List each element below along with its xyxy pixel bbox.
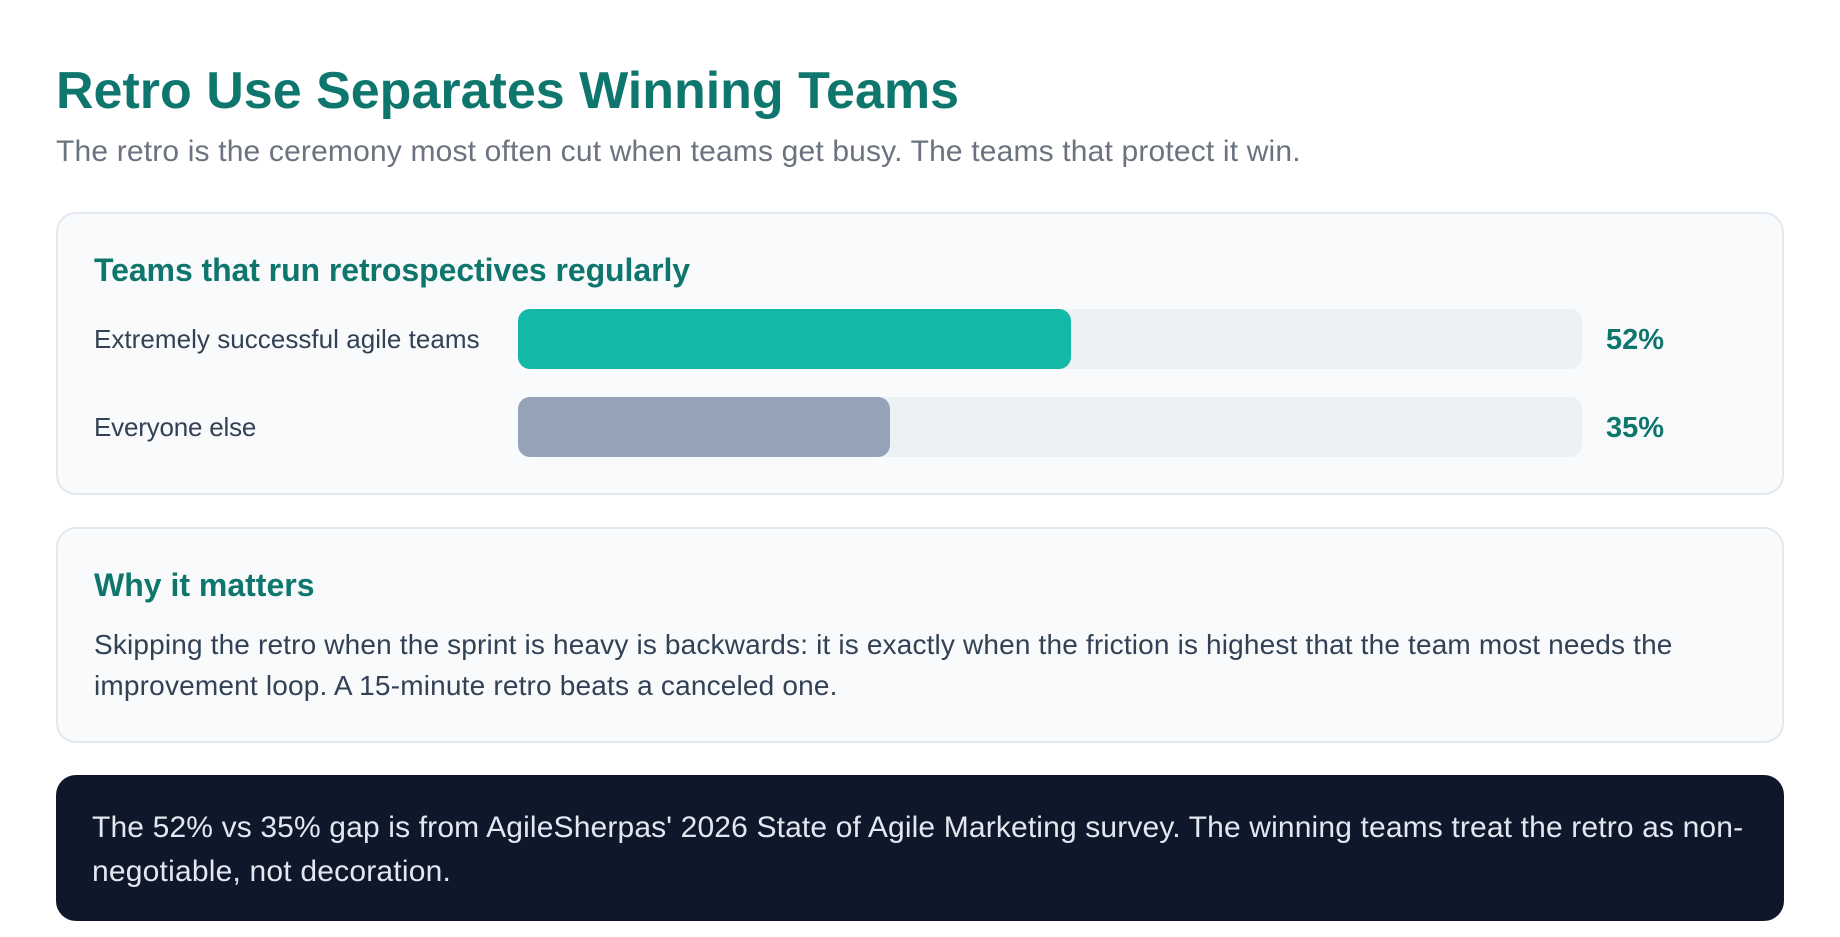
- bar row: everyone else: [94, 397, 1664, 457]
- title: Retro Use Separates Winning Teams: [56, 62, 959, 120]
- bar track and fill 35%: [518, 397, 1582, 457]
- value 52%: 52%: [1606, 324, 1664, 356]
- callout: source note: [56, 775, 1784, 921]
- panel: why it matters card: [56, 527, 1784, 743]
- callout text: [92, 811, 1743, 888]
- bar track and fill 52%: [518, 309, 1582, 369]
- label: Extremely successful agile teams: [94, 324, 480, 354]
- body text: [94, 629, 1673, 701]
- callout text: The 52% vs 35% gap is from AgileSherpas' 2026 State of Agile Marketing survey. The winning teams treat the retro as non-: [92, 811, 1743, 844]
- value 35%: 35%: [1606, 412, 1664, 444]
- panel: bar chart card: [56, 212, 1784, 495]
- body text: Skipping the retro when the sprint is heavy is backwards: it is exactly when the friction is highest that the team most needs the: [94, 629, 1673, 660]
- heading: bar chart: Teams that run retrospectives regularly: [94, 252, 690, 288]
- callout text: negotiable, not decoration.: [92, 855, 451, 888]
- body text: improvement loop. A 15-minute retro beats a canceled one.: [94, 670, 838, 701]
- heading: why it matters: Why it matters: [94, 567, 314, 603]
- label: Everyone else: [94, 412, 256, 442]
- bar row: extremely successful agile teams: [94, 309, 1664, 369]
- subtitle: The retro is the ceremony most often cut when teams get busy. The teams that protect it win.: [56, 135, 1301, 168]
